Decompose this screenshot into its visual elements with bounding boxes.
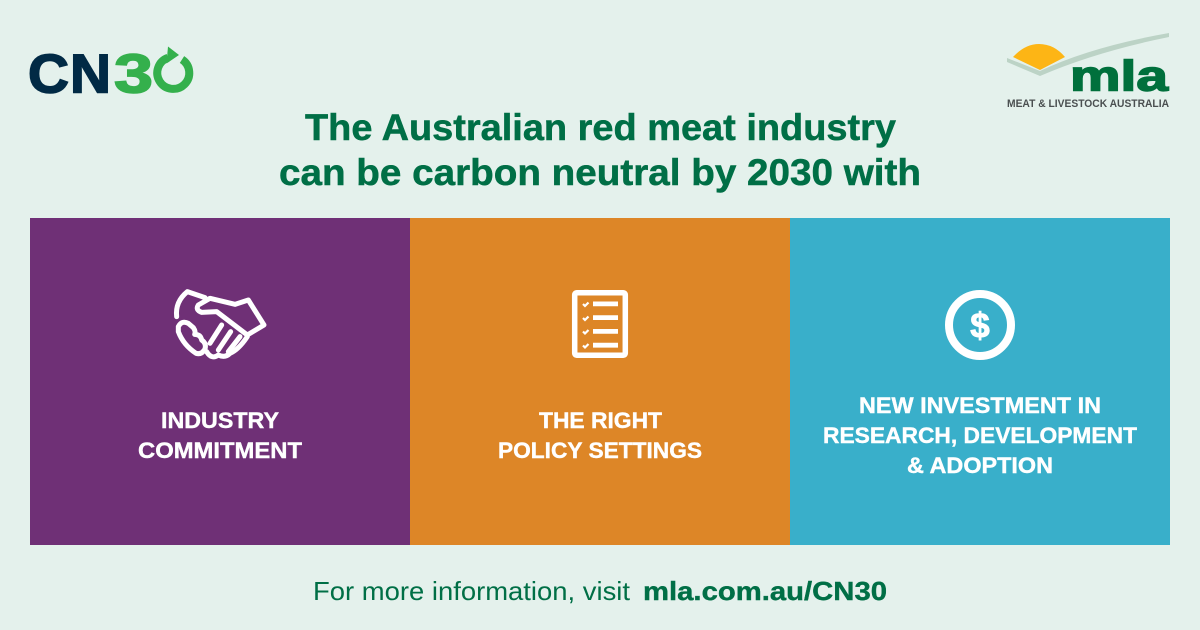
- label: [498, 408, 702, 463]
- panel: industry commitment: [30, 218, 410, 545]
- logo: MLA: mla: [1070, 52, 1169, 100]
- icon: dollar coin: [949, 294, 1011, 356]
- icon: checklist: [575, 293, 625, 355]
- footer: mla.com.au/CN30: [643, 576, 887, 606]
- icon: handshake: [176, 292, 264, 357]
- panel: investment: [790, 218, 1170, 545]
- label: INDUSTRY: [161, 408, 279, 433]
- heading: [279, 107, 921, 193]
- logo: CN30: 3: [114, 42, 153, 104]
- label: RESEARCH, DEVELOPMENT: [823, 423, 1138, 448]
- logo: CN30: N: [70, 42, 111, 104]
- heading: can be carbon neutral by 2030 with: [279, 152, 921, 193]
- label: & ADOPTION: [907, 453, 1053, 478]
- footer: For more information, visit: [313, 576, 631, 606]
- logo: MLA: [1007, 33, 1169, 110]
- heading: The Australian red meat industry: [305, 107, 896, 148]
- label: POLICY SETTINGS: [498, 438, 702, 463]
- panel: policy settings: [410, 218, 790, 545]
- logo: CN30: [28, 42, 189, 104]
- label: [138, 408, 303, 463]
- icon: dollar coin: $: [970, 306, 990, 346]
- label: [823, 393, 1138, 478]
- label: NEW INVESTMENT IN: [859, 393, 1101, 418]
- label: THE RIGHT: [539, 408, 663, 433]
- label: COMMITMENT: [138, 438, 303, 463]
- logo: CN30: C: [28, 42, 69, 104]
- footer: [313, 576, 887, 606]
- logo: MLA: MEAT & LIVESTOCK AUSTRALIA: [1007, 98, 1169, 110]
